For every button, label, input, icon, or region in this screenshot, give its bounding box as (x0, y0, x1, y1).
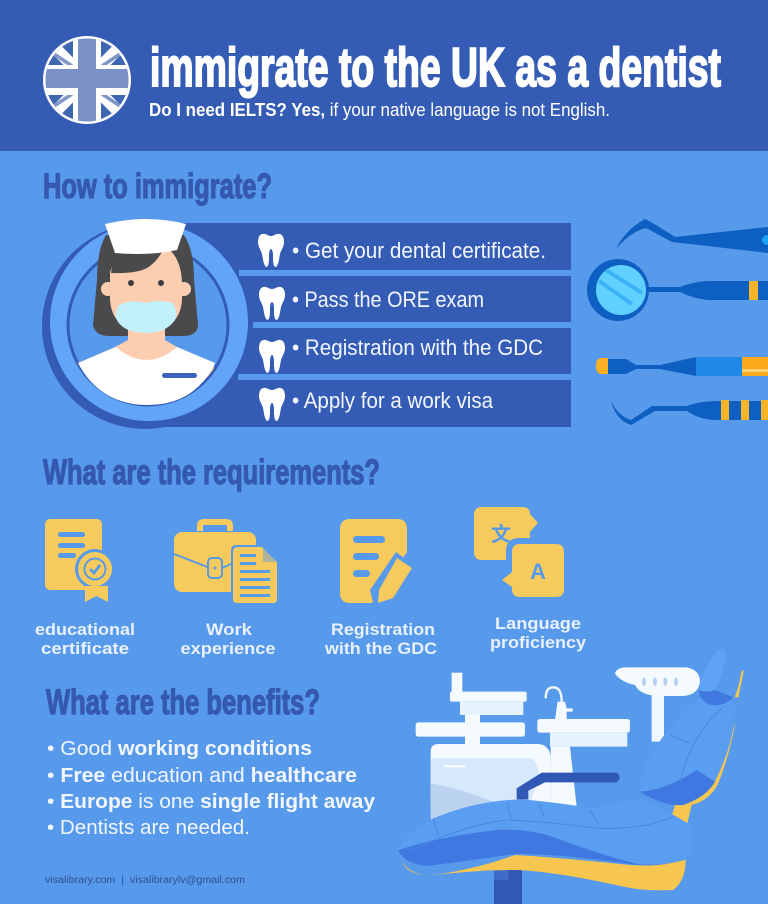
tool: dental probe (616, 219, 768, 253)
icon: tooth 2 (259, 287, 285, 320)
step text 4: • Apply for a work visa (292, 388, 494, 413)
step bars (150, 223, 571, 427)
icon: language bubbles (474, 507, 570, 602)
step text 2: • Pass the ORE exam (292, 287, 484, 312)
benefits list (47, 737, 376, 839)
tray unit (416, 673, 527, 747)
cabinet (431, 744, 551, 820)
benefits list: • Free education and healthcare (47, 764, 357, 787)
benefits list: • Dentists are needed. (47, 816, 250, 839)
label: registration with the GDC: with the GDC (324, 639, 437, 658)
icon: tooth 3 (259, 340, 285, 373)
backrest (640, 698, 735, 805)
icon: language bubbles: 文 (491, 522, 511, 546)
portrait: nurse in circle (42, 219, 248, 429)
label: registration with the GDC (324, 620, 437, 658)
panel: steps (150, 223, 571, 427)
step text 3: • Registration with the GDC (292, 335, 543, 360)
shirt (78, 347, 215, 405)
benefits list: • Europe is one single flight away (47, 790, 376, 813)
armrest (517, 773, 620, 799)
headrest (698, 649, 733, 705)
tool: curved explorer (611, 400, 768, 425)
illustration: dental chair (397, 649, 744, 904)
seat (397, 799, 694, 890)
nurse hat (105, 219, 186, 254)
face (110, 250, 182, 332)
chair column (494, 870, 522, 904)
label: language proficiency: Language (495, 614, 581, 633)
heading: requirements: What are the requirements? (43, 453, 380, 492)
label: language proficiency: proficiency (490, 633, 587, 652)
yellow frame (672, 670, 744, 823)
label: educational certificate: educational (35, 620, 135, 639)
sink (537, 687, 630, 807)
label: educational certificate: certificate (41, 639, 129, 658)
icon: tooth 4 (259, 388, 285, 421)
label: educational certificate (35, 620, 135, 658)
footer: visalibrary.com | visalibrarylv@gmail.com (45, 874, 245, 886)
subtitle: Do I need IELTS? Yes, if your native language is not English. (149, 99, 610, 120)
heading: benefits: What are the benefits? (46, 683, 320, 722)
mask (116, 301, 176, 333)
icon: registration document and pencil (340, 519, 412, 606)
label: registration with the GDC: Registration (331, 620, 435, 639)
benefits list: • Good working conditions (47, 737, 312, 760)
header band (0, 0, 768, 151)
label: work experience: experience (180, 639, 276, 658)
step text 1: • Get your dental certificate. (292, 238, 546, 263)
icon: tooth 1 (258, 234, 284, 267)
bar separators (238, 270, 571, 380)
label: work experience: Work (206, 620, 253, 639)
lamp (615, 667, 700, 742)
label: work experience (180, 620, 276, 658)
badge (162, 373, 197, 378)
heading: how to immigrate: How to immigrate? (43, 167, 272, 206)
icon: UK flag (43, 36, 131, 124)
icon: language bubbles: A (530, 559, 546, 584)
label: language proficiency (490, 614, 587, 652)
icon: educational certificate (45, 519, 115, 602)
tool: scaler (596, 357, 768, 376)
tool: dental mirror (587, 259, 768, 321)
icon: briefcase and document (174, 519, 279, 605)
hair (93, 235, 198, 336)
